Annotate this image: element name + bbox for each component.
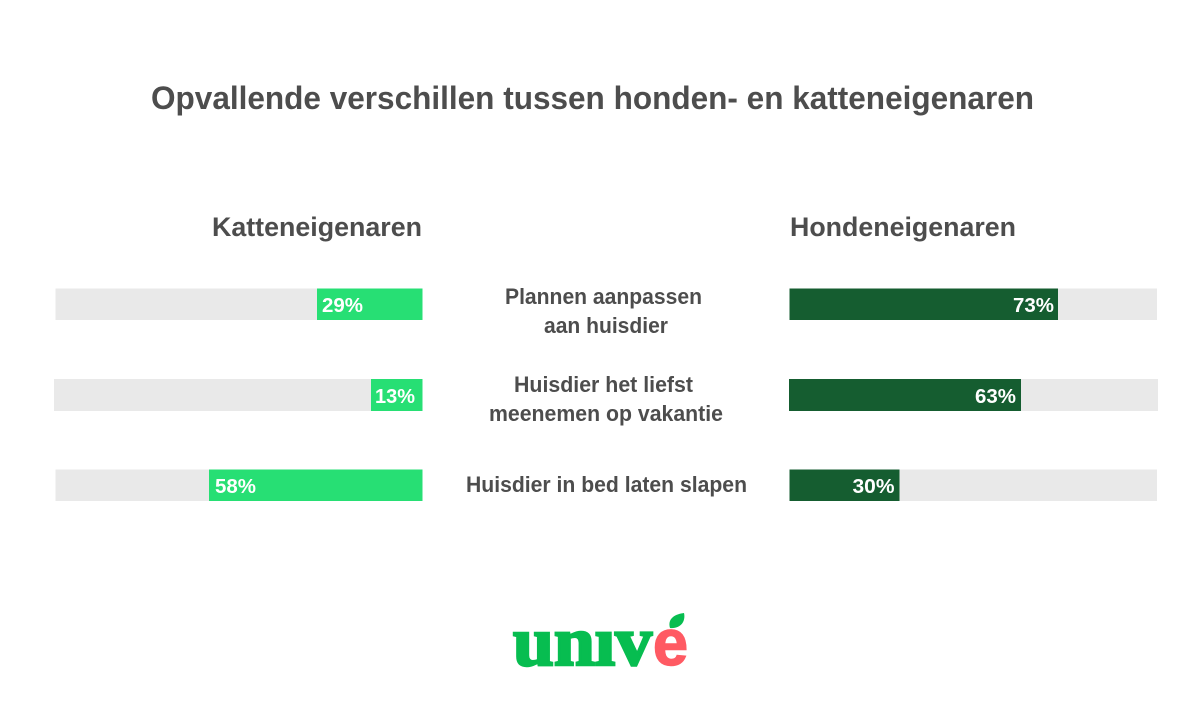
- bar: plannen aanpassen, katten 29%: [56, 288, 422, 320]
- panel: katteneigenaren bars: [54, 288, 422, 501]
- bar: vakantie, katten 13%: 13%: [375, 386, 415, 408]
- label: plannen aanpassen aan huisdier: aan huisdier: [544, 313, 668, 338]
- label: huisdier het liefst meenemen op vakantie: [489, 372, 723, 426]
- label: plannen aanpassen aan huisdier: Plannen aanpassen: [505, 284, 702, 309]
- bar: plannen aanpassen, honden 73%: [790, 288, 1157, 320]
- label: huisdier in bed laten slapen: Huisdier in bed laten slapen: [466, 472, 747, 497]
- label: huisdier het liefst meenemen op vakantie: Huisdier het liefst: [514, 372, 694, 397]
- heading: Katteneigenaren: Katteneigenaren: [212, 212, 422, 242]
- heading: Hondeneigenaren: Hondeneigenaren: [790, 212, 1016, 242]
- label: plannen aanpassen aan huisdier: [505, 284, 702, 338]
- icon: apple leaf: [669, 613, 684, 628]
- label: huisdier het liefst meenemen op vakantie: meenemen op vakantie: [489, 401, 723, 426]
- bar: vakantie, honden 63%: [789, 379, 1158, 411]
- bar: in bed slapen, katten 58%: [56, 470, 422, 501]
- title: Opvallende verschillen tussen honden- en katteneigenaren: [151, 80, 1034, 116]
- bar: in bed slapen, honden 30%: 30%: [852, 476, 895, 498]
- bar: in bed slapen, honden 30%: [790, 470, 1157, 501]
- bar: plannen aanpassen, katten 29%: 29%: [322, 295, 363, 317]
- bar: in bed slapen, katten 58%: 58%: [215, 476, 256, 498]
- panel: row labels: [466, 284, 747, 497]
- bar: vakantie, honden 63%: 63%: [975, 386, 1016, 408]
- logo: Univé: unıv: [513, 604, 652, 681]
- panel: hondeneigenaren bars: [789, 288, 1158, 501]
- bar: vakantie, katten 13%: [54, 379, 422, 411]
- bar: plannen aanpassen, honden 73%: 73%: [1013, 295, 1054, 317]
- logo: Univé: e: [653, 606, 688, 679]
